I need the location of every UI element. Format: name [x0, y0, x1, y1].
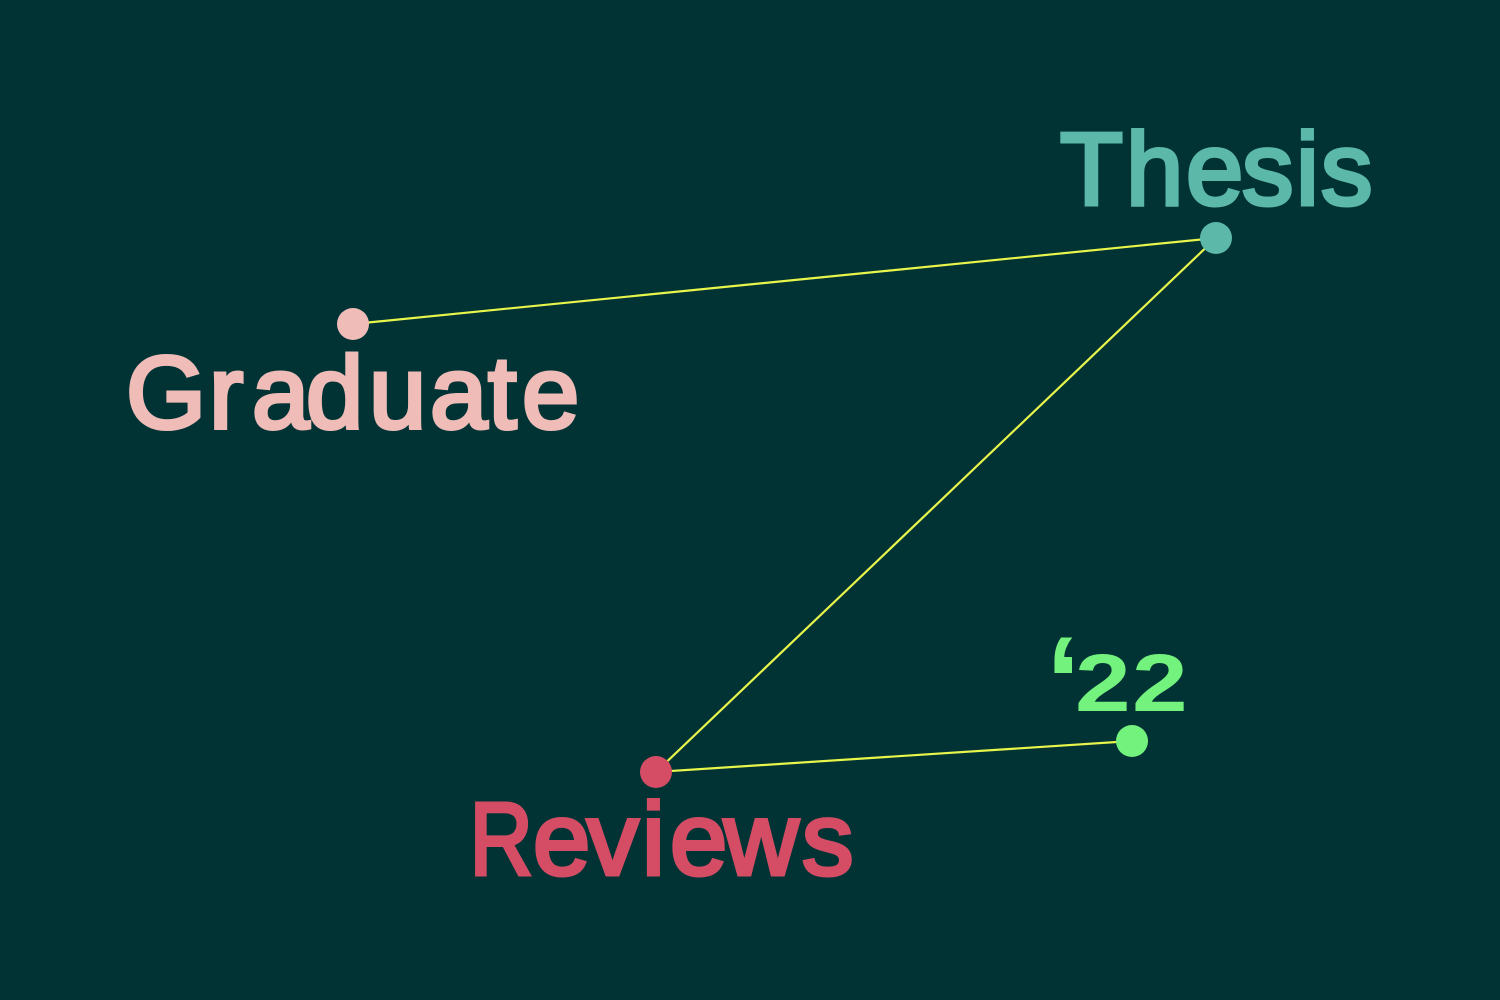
label: '22: ‘: [1046, 612, 1081, 751]
connecting line: [353, 238, 1216, 772]
dot: Thesis: [1200, 222, 1232, 254]
label: Graduate: Graduate: [126, 335, 579, 450]
label: Thesis: Thesis: [1060, 112, 1372, 226]
dot: 22: [1116, 725, 1148, 757]
label: '22: 22: [1075, 637, 1188, 729]
label: Reviews: R: [470, 782, 533, 897]
dot: Graduate: [337, 308, 369, 340]
label: Reviews: eviews: [533, 782, 854, 896]
dot: Reviews: [640, 756, 672, 788]
label: '22: [1046, 612, 1188, 751]
